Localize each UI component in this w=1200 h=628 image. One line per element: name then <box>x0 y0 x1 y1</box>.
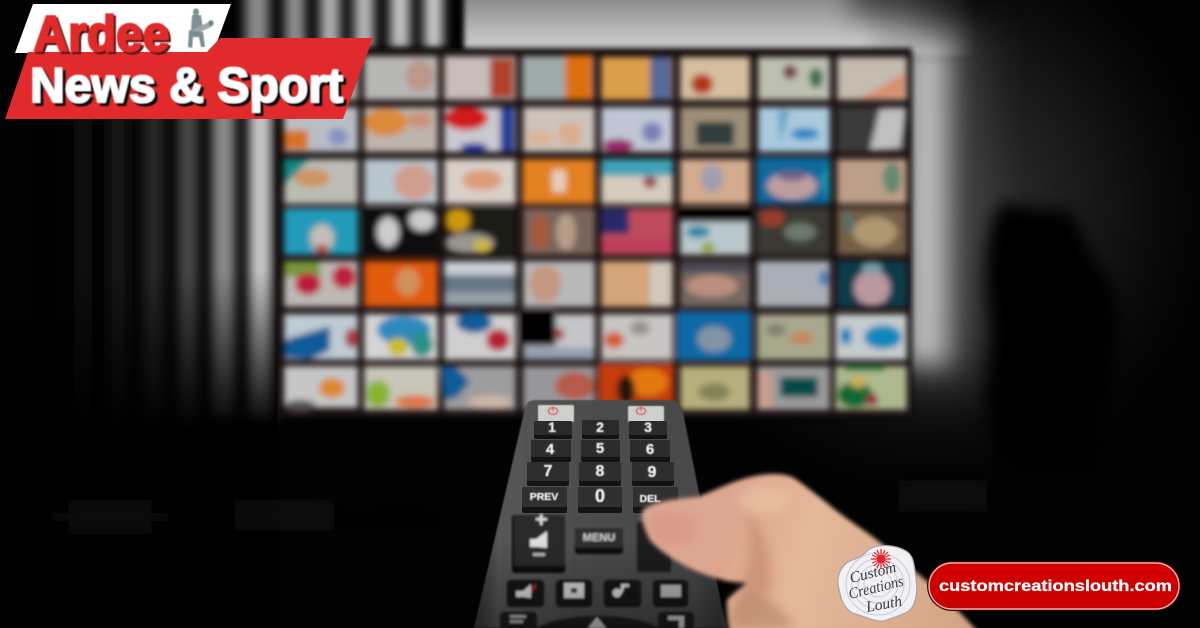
badge wording: Custom <box>848 559 898 587</box>
row 6 of channel tiles <box>284 310 907 361</box>
remote body <box>474 400 726 628</box>
badge wording <box>847 559 905 616</box>
remote lower shade <box>474 540 726 628</box>
lower finger shadow <box>730 584 795 628</box>
News & Sport heading: News & Sport <box>33 62 346 116</box>
key labels: PREV <box>530 491 558 503</box>
hand shape <box>642 474 978 628</box>
row 5 of channel tiles <box>284 261 907 307</box>
thumb shading <box>742 512 772 595</box>
pill shape <box>927 561 1181 611</box>
lower keys <box>500 514 694 628</box>
key labels: 0 <box>595 486 605 506</box>
key labels: 2 <box>596 419 604 435</box>
key labels: 3 <box>644 419 652 435</box>
knuckle highlight <box>738 486 790 514</box>
key labels: 9 <box>648 464 657 481</box>
red starburst <box>871 549 891 569</box>
dark plant silhouette <box>985 204 1118 470</box>
hand and thumb <box>642 474 978 628</box>
white banner <box>15 4 231 53</box>
wall shade at the top right corner <box>850 0 1000 18</box>
TV remote control <box>474 400 726 628</box>
row 1 of channel tiles <box>284 55 907 100</box>
badge seal <box>838 546 917 621</box>
key labels: 7 <box>544 463 553 480</box>
row 4 of channel tiles <box>284 208 907 255</box>
key labels <box>530 419 661 506</box>
faint sofa on the floor <box>60 488 995 526</box>
key labels: 1 <box>548 419 556 435</box>
small key icons <box>510 583 684 628</box>
TV frame <box>278 48 912 418</box>
website pill button <box>927 561 1181 611</box>
thumb tip blush <box>648 512 696 544</box>
row 2 of channel tiles <box>284 106 907 153</box>
website address: customcreationslouth.com <box>939 578 1172 595</box>
seal rings <box>846 553 910 615</box>
bright wall above the TV <box>464 0 984 55</box>
key labels: 8 <box>596 463 605 480</box>
red banner <box>5 38 373 119</box>
menu label: MENU <box>583 532 615 544</box>
curtains on the left <box>38 0 443 440</box>
badge wording: Louth <box>864 593 904 616</box>
Ardee heading: Ardee <box>36 8 172 64</box>
key labels: 5 <box>596 440 604 457</box>
Ardee heading: Ardee <box>34 6 170 62</box>
wall glow <box>640 0 1200 500</box>
logo: Ardee News & Sport <box>5 4 373 119</box>
number keys <box>522 420 678 513</box>
key labels: 4 <box>546 441 555 458</box>
News & Sport heading: News & Sport <box>30 59 343 113</box>
icon: statue <box>188 8 214 48</box>
curtain fade toward the floor <box>0 270 278 628</box>
key labels: 6 <box>646 441 654 458</box>
volume icon <box>530 514 547 556</box>
row 3 of channel tiles <box>284 157 907 204</box>
badge wording: Creations <box>847 573 905 603</box>
tile grid <box>284 55 907 412</box>
TV screen wall <box>278 48 912 418</box>
power buttons <box>538 405 664 422</box>
badge: Custom Creations Louth <box>838 546 917 621</box>
key labels: DEL <box>640 493 661 505</box>
row 7 of channel tiles <box>284 363 907 412</box>
